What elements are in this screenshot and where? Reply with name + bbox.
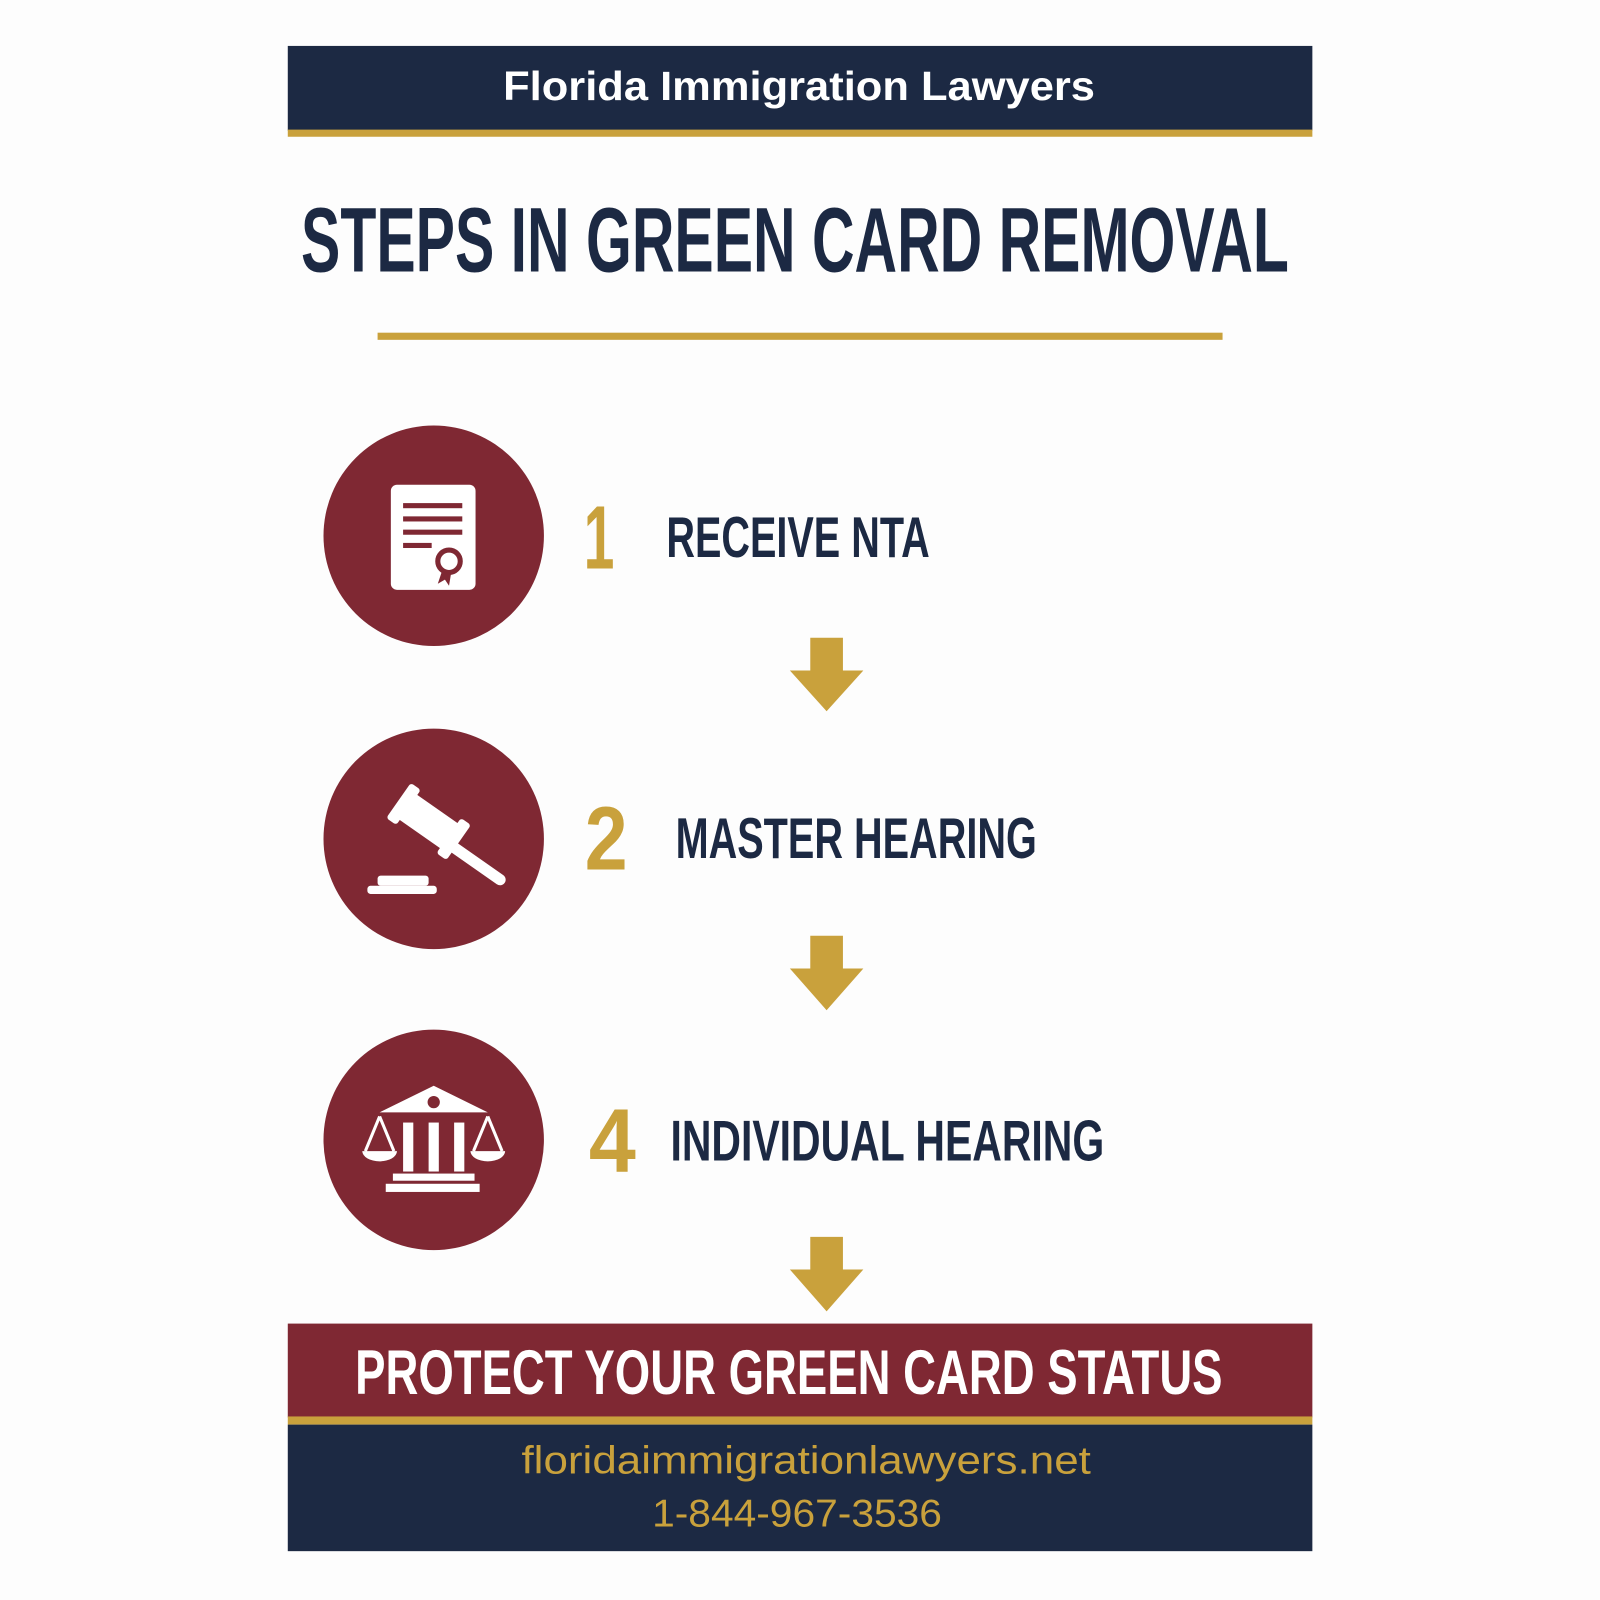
banner: protect: PROTECT YOUR GREEN CARD STATUS <box>355 1338 1223 1408</box>
number 4: 4 <box>589 1092 636 1192</box>
footer: contact: floridaimmigrationlawyers.net <box>521 1440 1091 1483</box>
arrow 3 <box>790 1237 863 1311</box>
footer: contact: 1-844-967-3536 <box>652 1493 942 1536</box>
step 1 <box>323 426 930 646</box>
arrow 2 <box>790 936 863 1010</box>
number 1: 1 <box>584 488 614 588</box>
arrow 1 <box>790 638 863 711</box>
title underline <box>378 333 1223 340</box>
icon: document <box>323 426 544 646</box>
step 3 <box>323 1030 1104 1250</box>
icon: gavel <box>323 729 544 949</box>
label: MASTER HEARING <box>676 807 1037 871</box>
label: INDIVIDUAL HEARING <box>670 1109 1104 1173</box>
label: RECEIVE NTA <box>666 506 930 570</box>
banner: protect <box>288 1324 1312 1417</box>
icon: courthouse scales <box>323 1030 544 1250</box>
number 2: 2 <box>585 789 628 889</box>
header text: Florida Immigration Lawyers <box>503 63 1095 109</box>
footer: contact <box>288 1425 1312 1551</box>
step 2 <box>323 729 1037 949</box>
header bar <box>288 46 1312 137</box>
